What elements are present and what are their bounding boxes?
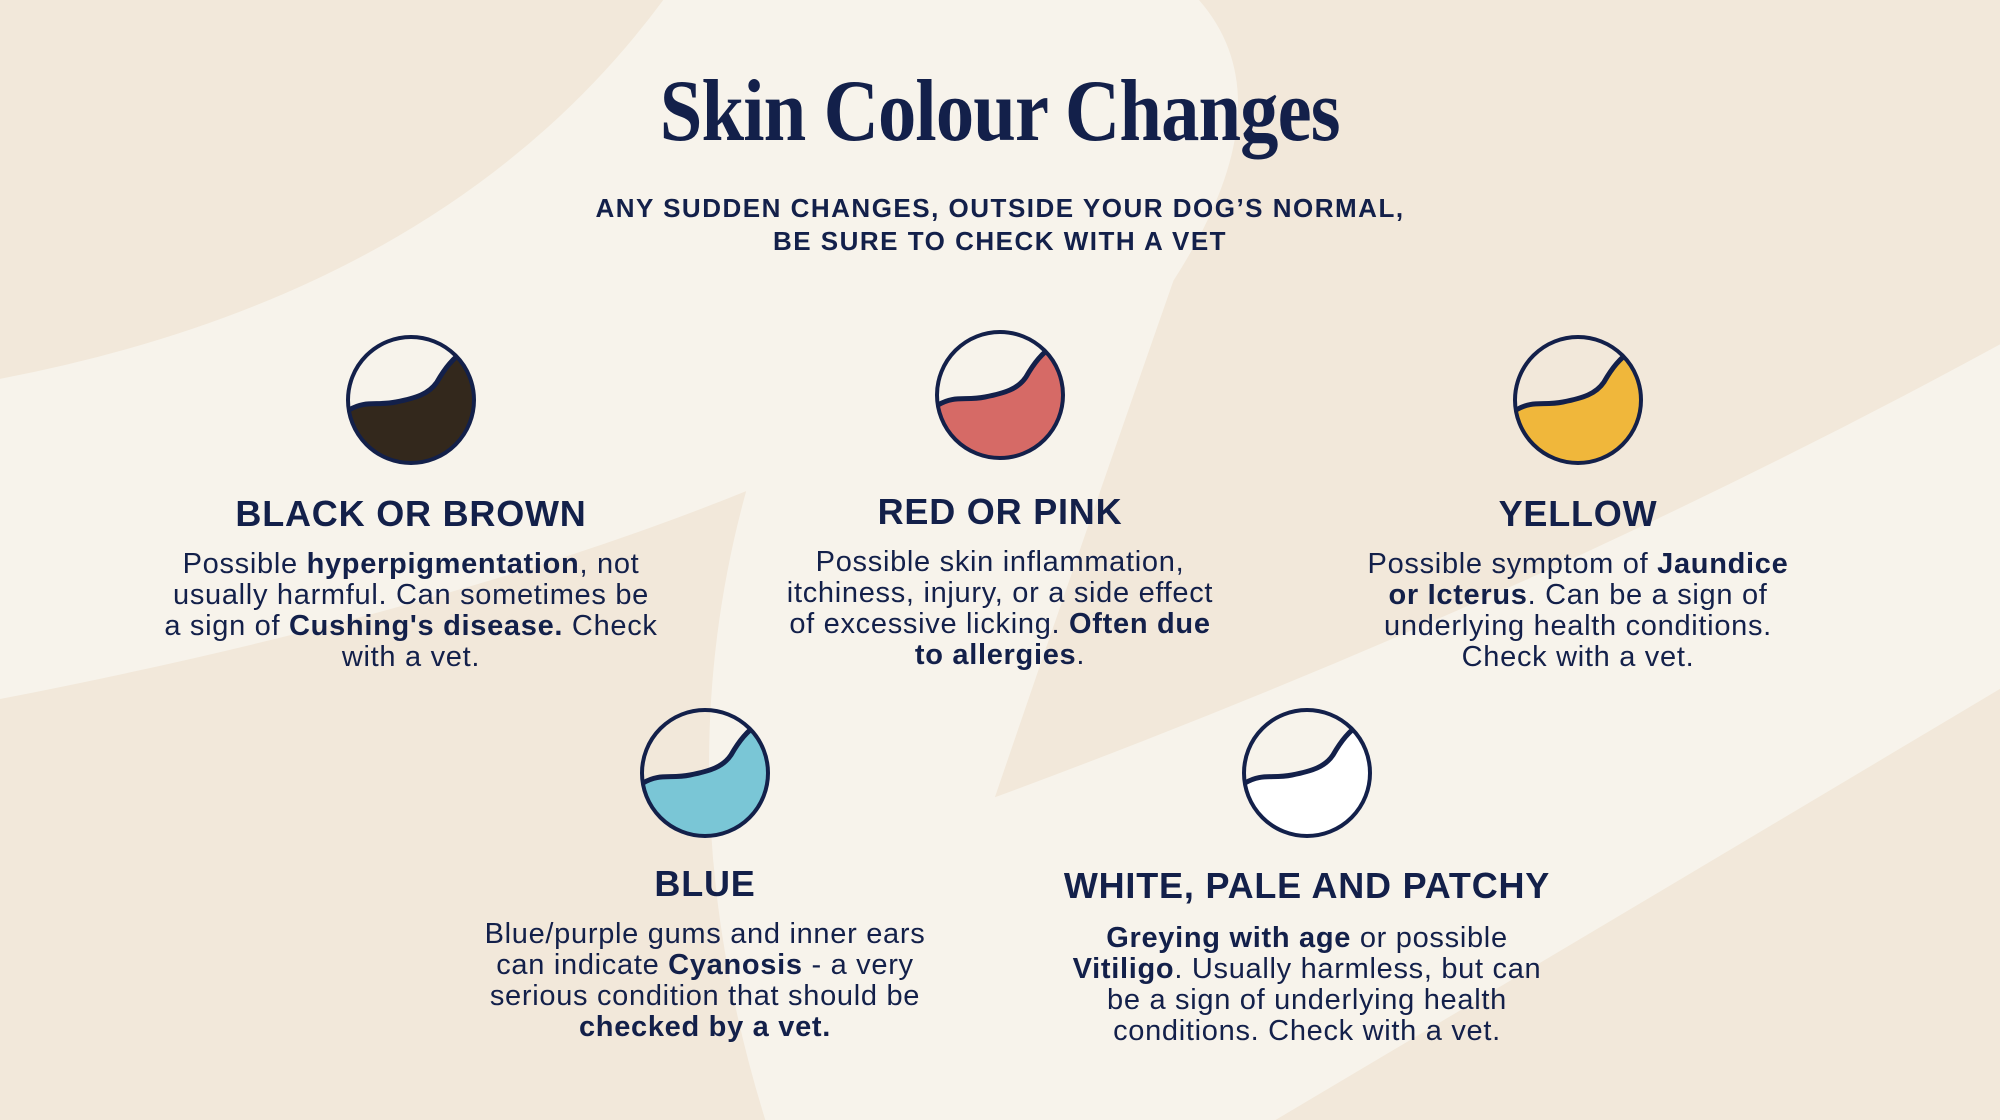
text <box>787 546 1213 671</box>
text: Possible hyperpigmentation, not usually harmful. Can sometimes be a sign of Cushing's disease. Check with a vet. <box>164 548 658 673</box>
heading: WHITE, PALE AND PATCHY <box>1064 865 1550 906</box>
icon: blue circle <box>640 708 770 838</box>
panel: white, pale and patchy <box>1064 708 1550 1047</box>
icon: black/brown circle <box>346 335 476 465</box>
text: Greying with age or possible Vitiligo. Usually harmless, but can be a sign of underlying health conditions. Check with a vet. <box>1073 922 1541 1047</box>
panel: yellow <box>1368 335 1788 673</box>
heading: RED OR PINK <box>878 491 1122 532</box>
text: Possible skin inflammation, itchiness, injury, or a side effect <box>787 546 1213 609</box>
text: Blue/purple gums and inner ears can indicate Cyanosis - a very serious condition that should be checked by a vet. <box>485 918 925 1043</box>
heading: BLUE <box>654 863 756 904</box>
icon: red circle <box>935 330 1065 460</box>
heading: BLACK OR BROWN <box>235 493 587 534</box>
panel: blue <box>485 708 925 1043</box>
panel: red or pink <box>787 330 1213 671</box>
subtitle <box>595 193 1405 256</box>
icon: white circle <box>1242 708 1372 838</box>
text: of excessive licking. Often due to allergies. <box>789 608 1211 671</box>
title: Skin Colour Changes <box>660 63 1340 160</box>
heading: YELLOW <box>1499 493 1657 534</box>
panel: black or brown <box>164 335 658 673</box>
subtitle: BE SURE TO CHECK WITH A VET <box>773 226 1227 256</box>
text: Possible symptom of Jaundice or Icterus. Can be a sign of underlying health conditions. Check with a vet. <box>1368 548 1788 673</box>
icon: yellow circle <box>1513 335 1643 465</box>
subtitle: ANY SUDDEN CHANGES, OUTSIDE YOUR DOG’S NORMAL, <box>595 193 1405 223</box>
